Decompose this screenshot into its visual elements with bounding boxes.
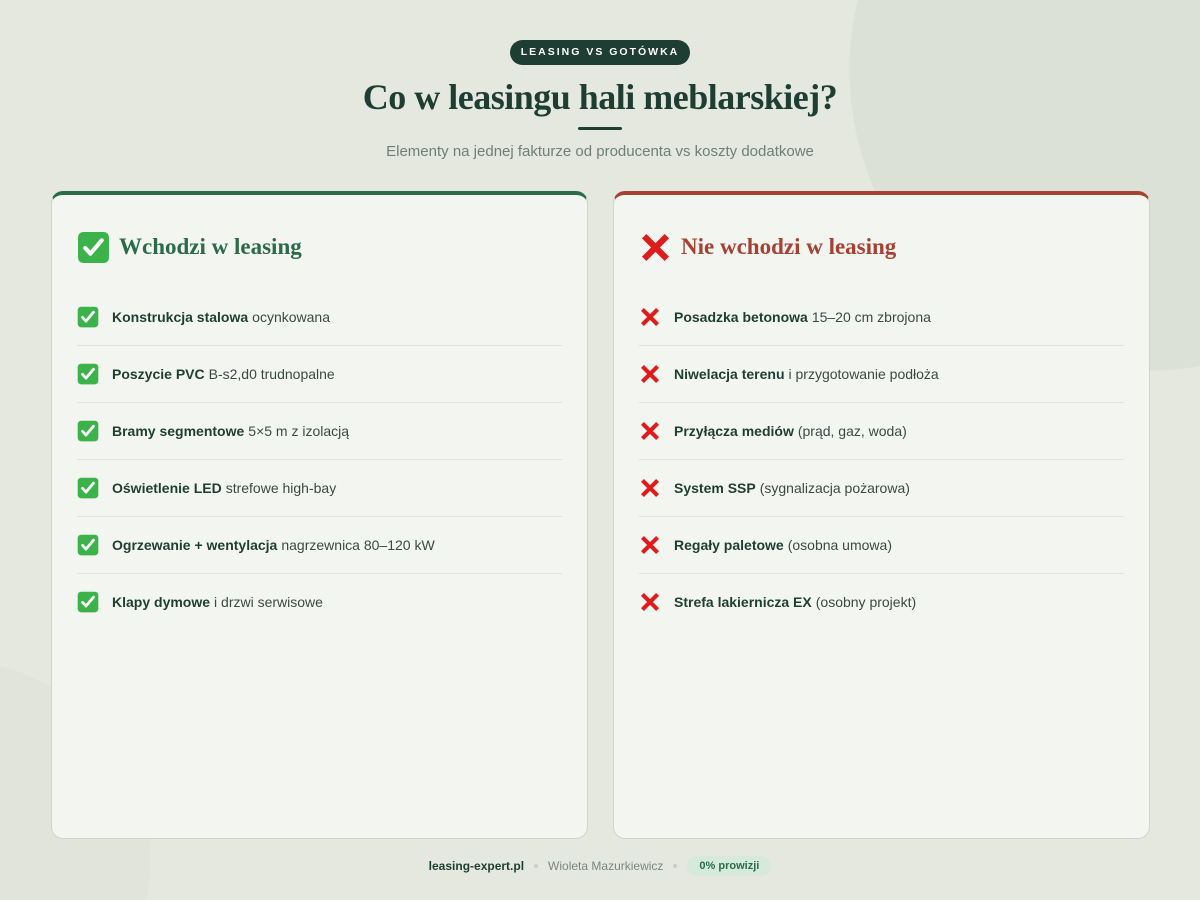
- item 4: System SSP: [674, 480, 756, 496]
- heading: nie wchodzi: Nie wchodzi w leasing: [681, 234, 896, 259]
- item 6: i drzwi serwisowe: [214, 594, 323, 610]
- item 2: [641, 365, 939, 383]
- item 1: 15–20 cm zbrojona: [812, 308, 931, 324]
- subtitle: Elementy na jednej fakturze od producenta vs koszty dodatkowe: [386, 143, 814, 160]
- item 1: Konstrukcja stalowa: [112, 308, 248, 324]
- item 4: (sygnalizacja pożarowa): [760, 480, 910, 496]
- panel: wchodzi w leasing: [51, 191, 588, 839]
- item 6: (osobny projekt): [816, 594, 916, 610]
- item 3: (prąd, gaz, woda): [798, 422, 907, 438]
- item 1: ocynkowana: [252, 308, 330, 324]
- footer: 0% prowizji: [699, 860, 759, 872]
- item 1: Posadzka betonowa: [674, 308, 808, 324]
- item 5: Ogrzewanie + wentylacja: [112, 536, 277, 552]
- item 5: Regały paletowe: [674, 536, 784, 552]
- item 3: [78, 420, 350, 442]
- footer: [429, 856, 771, 876]
- item 6: Strefa lakiernicza EX: [674, 594, 812, 610]
- title: Co w leasingu hali meblarskiej?: [363, 77, 837, 117]
- item 5: [78, 534, 435, 556]
- item 5: (osobna umowa): [788, 536, 892, 552]
- item 2: [78, 364, 335, 384]
- item 3: Przyłącza mediów: [674, 422, 794, 438]
- item 6: Klapy dymowe: [112, 594, 210, 610]
- item 2: Poszycie PVC: [112, 366, 205, 382]
- item 5: [641, 536, 892, 554]
- item 2: i przygotowanie podłoża: [788, 366, 939, 382]
- item 6: [641, 593, 916, 611]
- item 6: [78, 592, 323, 612]
- item 1: [78, 306, 330, 328]
- item 3: [641, 422, 907, 440]
- item 4: [78, 478, 336, 498]
- item 3: 5×5 m z izolacją: [248, 422, 349, 438]
- item 4: strefowe high-bay: [226, 480, 336, 496]
- item 3: Bramy segmentowe: [112, 422, 244, 438]
- item 5: nagrzewnica 80–120 kW: [281, 536, 435, 552]
- footer: leasing-expert.pl: [429, 859, 524, 873]
- item 2: B-s2,d0 trudnopalne: [209, 366, 335, 382]
- footer: Wioleta Mazurkiewicz: [548, 859, 663, 873]
- item 4: [641, 479, 910, 497]
- item 1: [641, 308, 931, 326]
- panel: nie wchodzi w leasing: [613, 191, 1150, 839]
- heading: wchodzi: Wchodzi w leasing: [119, 234, 302, 259]
- badge: leasing vs gotówka: LEASING VS GOTÓWKA: [521, 46, 679, 58]
- heading: wchodzi: [78, 232, 302, 263]
- item 4: Oświetlenie LED: [112, 480, 222, 496]
- badge: leasing vs gotówka: [510, 40, 690, 65]
- item 2: Niwelacja terenu: [674, 366, 784, 382]
